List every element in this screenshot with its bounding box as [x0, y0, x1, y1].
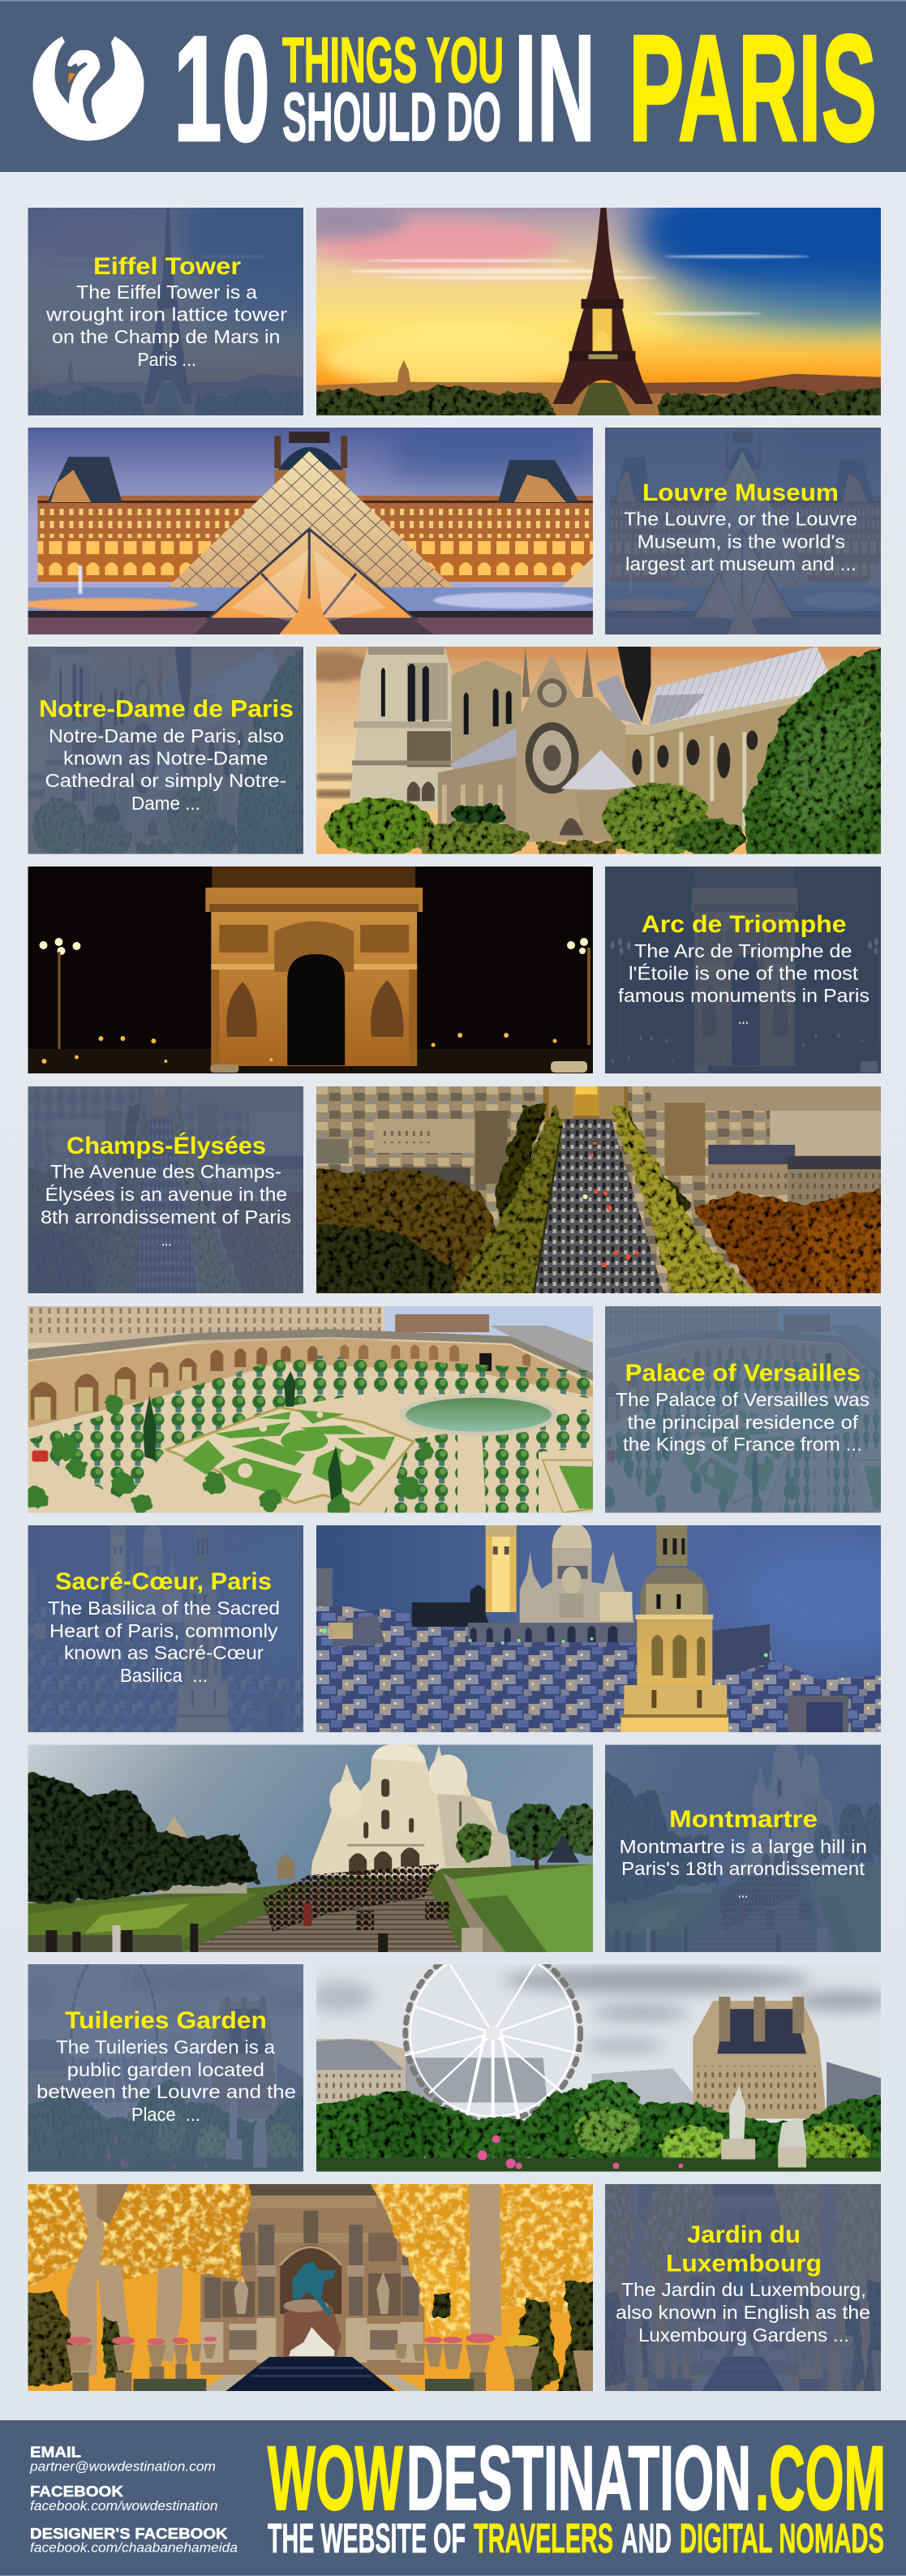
text: Sacre-Coeur description [48, 1598, 280, 1686]
text: Tuileries description: between the Louvre and the [36, 2081, 296, 2102]
text: Notre-Dame description: Dame ... [131, 793, 200, 814]
panel: Montmartre text [601, 1744, 887, 1952]
photo: Tuileries Garden [308, 1946, 891, 2171]
text: Jardin description: also known in English as the [616, 2302, 870, 2323]
photo: Arc de Triomphe [28, 867, 593, 1073]
text: Louvre description: largest art museum and ... [625, 553, 857, 574]
text: Sacre-Coeur description: known as Sacré-Cœur [64, 1642, 264, 1663]
tagline: AND [621, 2515, 672, 2561]
title: number 10: 10 [174, 6, 270, 173]
text: Tuileries description [36, 2036, 296, 2125]
text: Jardin description: Luxembourg Gardens ... [638, 2324, 849, 2346]
website name: WOW [268, 2428, 403, 2529]
tagline: THE WEBSITE OF [268, 2515, 466, 2561]
text: Champs-Elysees description: Élysées is an avenue in the [45, 1184, 287, 1205]
panel: Palace of Versailles text [603, 1306, 882, 1518]
text: Champs-Elysees description: ... [161, 1228, 172, 1249]
text: Notre-Dame description: Cathedral or simply Notre- [45, 770, 286, 791]
tagline: TRAVELERS [474, 2515, 613, 2561]
text: Sacre-Coeur description: Heart of Paris, commonly [49, 1620, 278, 1641]
photo: Louvre Museum [20, 428, 595, 634]
text: Louvre description: The Louvre, or the Louvre [624, 509, 857, 530]
photo: Jardin du Luxembourg [20, 2176, 595, 2395]
footer contact: designer's facebook [30, 2526, 238, 2556]
text: Eiffel Tower description: wrought iron lattice tower [45, 303, 287, 325]
photo: Champs-Elysees [308, 1086, 883, 1301]
text: Notre-Dame description [45, 725, 286, 814]
heading: Champs-Elysees: Champs-Élysées [67, 1132, 266, 1159]
text: Versailles description: The Palace of Versailles was [616, 1389, 870, 1410]
heading: Notre-Dame de Paris: Notre-Dame de Paris [39, 696, 294, 723]
footer contact: designer's facebook: facebook.com/chaabanehameida [30, 2540, 238, 2556]
photo: Notre-Dame [292, 647, 883, 860]
text: Montmartre description [620, 1836, 867, 1902]
text: Versailles description: the Kings of France from ... [623, 1434, 862, 1455]
text: Notre-Dame description: known as Notre-Dame [63, 748, 268, 769]
text: Arc de Triomphe description: ... [738, 1007, 749, 1028]
footer banner [0, 2420, 906, 2576]
tagline [268, 2515, 884, 2561]
photo: Palace of Versailles [25, 1306, 595, 1518]
text: Tuileries description: The Tuileries Garden is a [56, 2036, 275, 2058]
text: Versailles description: the principal residence of [628, 1412, 859, 1433]
photo: Sacre-Coeur skyline [316, 1521, 906, 1732]
text: Arc de Triomphe description [618, 940, 870, 1028]
heading: Arc de Triomphe: Arc de Triomphe [642, 911, 847, 938]
text: Montmartre description: Paris's 18th arrondissement [621, 1858, 865, 1879]
photo: Eiffel Tower [276, 147, 906, 424]
footer contact: facebook [30, 2484, 217, 2514]
title: things you: THINGS YOU [282, 24, 504, 96]
text: Jardin description: The Jardin du Luxembourg, [621, 2279, 866, 2300]
heading: Tuileries Garden: Tuileries Garden [65, 2007, 267, 2034]
text: Champs-Elysees description [41, 1161, 291, 1249]
heading: Montmartre: Montmartre [669, 1806, 818, 1833]
footer contact: email: EMAIL [30, 2445, 81, 2461]
text: Sacre-Coeur description: The Basilica of the Sacred [48, 1598, 280, 1619]
heading: Jardin du Luxembourg: Jardin du [687, 2221, 801, 2248]
text: Champs-Elysees description: The Avenue des Champs- [50, 1161, 281, 1182]
panel: Sacre-Coeur text [28, 1521, 328, 1732]
text: Louvre description [624, 509, 857, 574]
panel: Notre-Dame text [16, 647, 304, 860]
panel: Champs-Elysees text [24, 1086, 304, 1301]
text: Eiffel Tower description [45, 282, 287, 370]
header banner [0, 0, 906, 173]
panel: Eiffel Tower text [8, 147, 419, 424]
text: Tuileries description: public garden located [67, 2059, 264, 2080]
icon: white swan logo [32, 28, 144, 141]
panel: Jardin du Luxembourg text [601, 2176, 882, 2395]
panel: Louvre Museum text [601, 428, 882, 634]
heading: Jardin du Luxembourg [666, 2221, 822, 2277]
text: Eiffel Tower description: The Eiffel Tower is a [76, 282, 257, 303]
panel: Arc de Triomphe text [605, 867, 881, 1073]
heading: Palace of Versailles: Palace of Versailles [625, 1360, 861, 1387]
text: Arc de Triomphe description: The Arc de Triomphe de [634, 940, 852, 961]
panel: Tuileries Garden text [24, 1946, 308, 2171]
text: Sacre-Coeur description: Basilica ... [120, 1665, 208, 1686]
text: Louvre description: Museum, is the world's [638, 531, 845, 552]
text: Arc de Triomphe description: l'Étoile is one of the most [629, 962, 859, 983]
footer contact: email [29, 2445, 216, 2475]
text: Eiffel Tower description: Paris ... [138, 349, 196, 370]
heading: Louvre Museum: Louvre Museum [642, 480, 839, 506]
text: Eiffel Tower description: on the Champ de Mars in [52, 326, 281, 347]
text: Montmartre description: ... [738, 1881, 748, 1902]
title: in: IN [514, 3, 595, 173]
heading: Jardin du Luxembourg: Luxembourg [666, 2251, 822, 2277]
text: Jardin description [616, 2279, 870, 2346]
footer contact: email: partner@wowdestination.com [29, 2459, 216, 2475]
text: Montmartre description: Montmartre is a large hill in [620, 1836, 867, 1857]
heading: Sacre-Coeur, Paris: Sacré-Cœur, Paris [55, 1568, 272, 1595]
title: should do: SHOULD DO [282, 79, 501, 155]
footer contact: designer's facebook: DESIGNER'S FACEBOOK [30, 2526, 228, 2542]
footer contact: facebook: facebook.com/wowdestination [30, 2498, 217, 2514]
photo: Montmartre [20, 1744, 605, 1952]
text: Tuileries description: Place ... [131, 2104, 200, 2125]
text: Notre-Dame description: Notre-Dame de Paris, also [49, 725, 284, 746]
text: Champs-Elysees description: 8th arrondissement of Paris [41, 1206, 291, 1228]
heading: Eiffel Tower: Eiffel Tower [93, 253, 241, 280]
text: Versailles description [616, 1389, 870, 1455]
text: Arc de Triomphe description: famous monuments in Paris [618, 985, 870, 1006]
footer contact: facebook: FACEBOOK [30, 2484, 123, 2500]
